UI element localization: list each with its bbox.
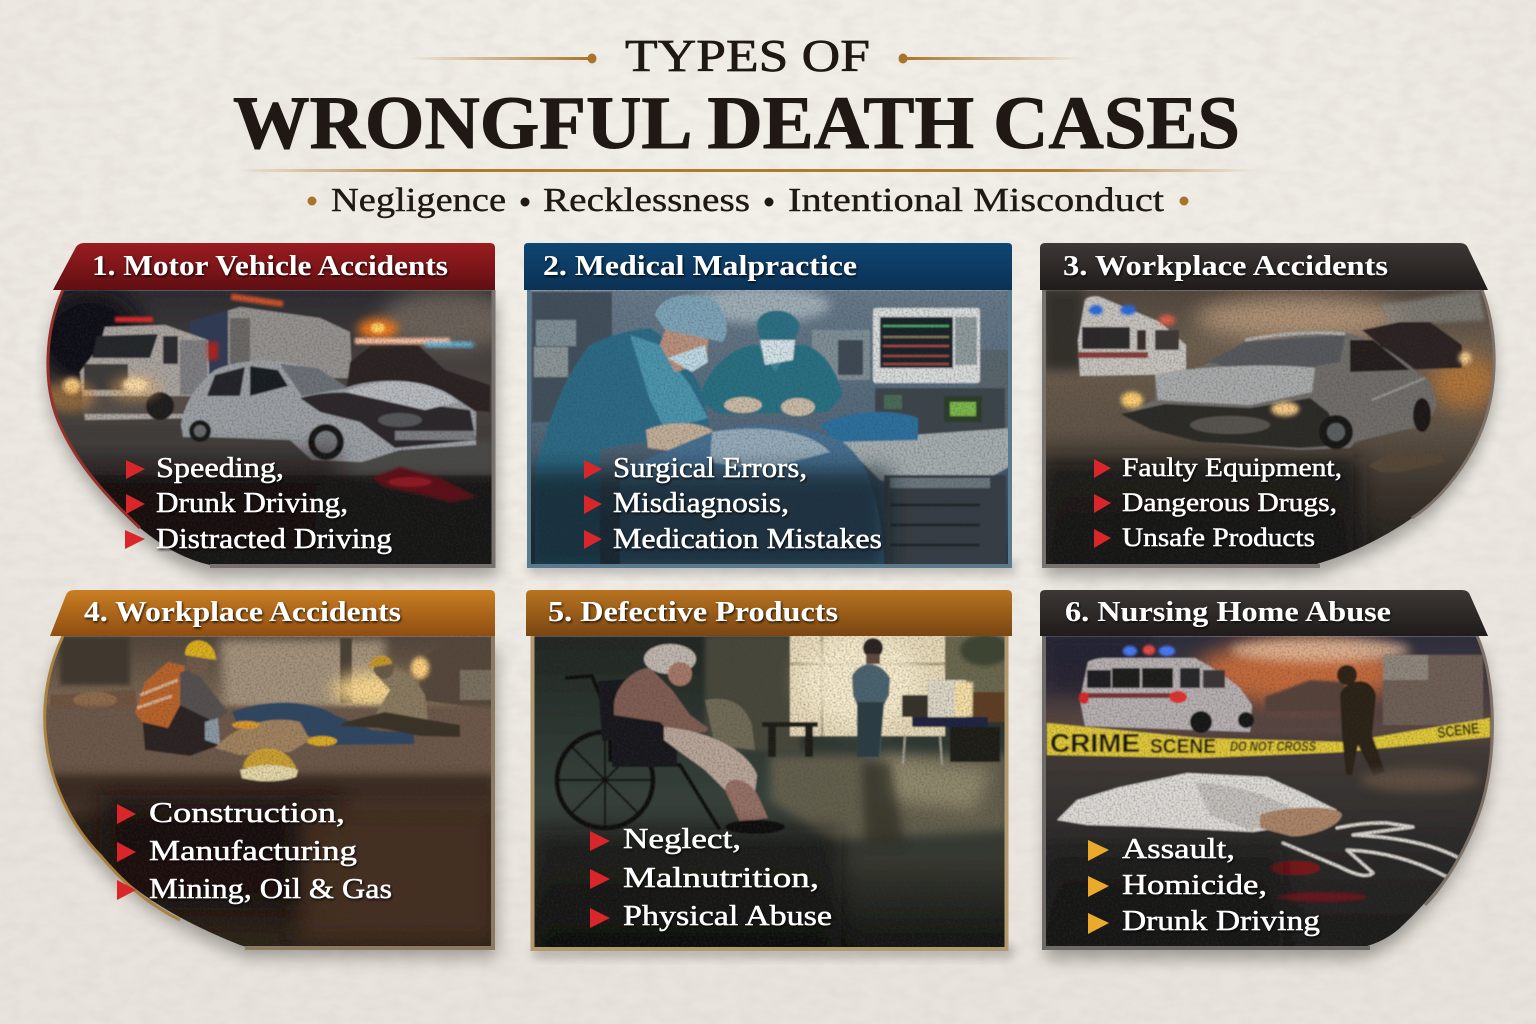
bullet list: Drunk Driving,	[156, 487, 348, 519]
monitor	[873, 308, 980, 383]
bullet list: Faulty Equipment,	[1122, 453, 1342, 482]
panel: 3 workplace accidents	[1040, 243, 1500, 576]
bullet list: Construction,	[149, 797, 345, 829]
subtitle with bullet terms: Intentional Misconduct	[788, 182, 1165, 219]
rocks	[50, 690, 140, 735]
tape text	[1050, 720, 1480, 758]
banner	[53, 243, 495, 290]
bullet list: Physical Abuse	[623, 900, 832, 932]
bullet list: Misdiagnosis,	[613, 487, 789, 519]
bullet list	[584, 452, 882, 555]
ground lower dark	[1040, 458, 1360, 573]
tow truck cab	[80, 325, 210, 420]
surgeon 1	[535, 328, 712, 567]
back wall with plants	[705, 636, 800, 751]
standing person	[1340, 681, 1385, 776]
elderly woman	[614, 668, 708, 735]
bullet list	[1088, 833, 1320, 937]
panel: 4 workplace accidents	[40, 590, 497, 958]
wrecked car	[1120, 333, 1437, 450]
panel: 5 defective products	[526, 590, 1013, 958]
panel border	[532, 636, 1006, 949]
side table	[762, 722, 818, 727]
banner title: 1. Motor Vehicle Accidents	[92, 250, 448, 282]
panel border	[48, 290, 140, 528]
panel border	[45, 636, 180, 920]
banner title: 2. Medical Malpractice	[543, 250, 857, 282]
subtitle with bullet terms	[308, 182, 1188, 219]
bullet list: Speeding,	[156, 452, 284, 484]
worker one	[142, 695, 220, 756]
banner	[1040, 590, 1488, 636]
bullet list	[117, 797, 392, 905]
bullet list: Distracted Driving	[156, 523, 392, 555]
title ornaments	[405, 54, 1085, 64]
covered body	[1057, 773, 1337, 832]
photo: operating room	[520, 287, 1012, 575]
surgeon 2	[700, 345, 843, 414]
armchair	[705, 699, 755, 750]
tape text: CRIME	[1050, 728, 1140, 758]
title divider	[235, 169, 1260, 172]
police suv	[1080, 658, 1252, 732]
bullet list: Medication Mistakes	[613, 523, 882, 555]
blood on road	[372, 467, 476, 502]
patient drape	[620, 425, 885, 567]
nurse	[852, 664, 890, 758]
ambulance	[1078, 296, 1186, 376]
photo: construction site	[40, 636, 496, 950]
police car and lights	[345, 345, 490, 412]
bullet list: Drunk Driving	[1122, 905, 1320, 937]
title line: types of: TYPES OF	[625, 30, 870, 81]
table and lamp	[902, 695, 928, 717]
crime scene tape	[1047, 718, 1490, 758]
bullet list: Surgical Errors,	[613, 452, 807, 484]
banner title: 3. Workplace Accidents	[1063, 250, 1388, 282]
panel border	[1412, 290, 1494, 518]
bullet list: Assault,	[1122, 833, 1235, 865]
chalk outline	[1283, 823, 1457, 877]
panel: 2 medical malpractice	[520, 243, 1015, 575]
panel: 6 nursing home abuse	[1040, 590, 1500, 959]
bullet list: Dangerous Drugs,	[1122, 488, 1337, 517]
title line: wrongful death cases: WRONGFUL DEATH CASES	[233, 82, 1240, 165]
bullet list: Unsafe Products	[1122, 523, 1315, 552]
photo: crime scene	[1040, 636, 1500, 950]
box truck	[226, 306, 352, 379]
bullet list	[125, 452, 392, 555]
tape text: DO NOT CROSS	[1230, 738, 1317, 754]
bullet list: Homicide,	[1122, 869, 1267, 901]
banner title: 5. Defective Products	[548, 596, 838, 628]
nurse shadow	[862, 762, 905, 845]
white bed	[842, 428, 1008, 482]
banner	[1040, 243, 1488, 290]
bullet list	[590, 823, 832, 932]
floor light	[770, 755, 1008, 840]
blood stains	[1270, 861, 1320, 875]
banner title: 4. Workplace Accidents	[84, 596, 401, 628]
bullet list	[1094, 453, 1342, 552]
subtitle with bullet terms: Recklessness	[543, 182, 750, 219]
panel: 1 motor vehicle accidents	[35, 243, 520, 576]
far car	[1362, 322, 1462, 370]
bright window	[790, 636, 945, 736]
feet	[1260, 807, 1342, 836]
panel border	[1425, 636, 1492, 905]
dark lower vignette	[531, 830, 841, 955]
dark lower vignette	[520, 470, 890, 575]
bullet list: Manufacturing	[149, 835, 357, 867]
title block	[233, 30, 1260, 219]
victim on ground	[232, 703, 414, 745]
banner	[524, 243, 1012, 290]
right equipment	[975, 350, 1008, 428]
worker two	[372, 668, 428, 728]
bullet list: Neglect,	[623, 823, 741, 855]
photo: wrecked car	[1040, 290, 1500, 573]
photo: crash scene	[49, 290, 492, 565]
bullet list: Mining, Oil & Gas	[149, 873, 392, 905]
banner title: 6. Nursing Home Abuse	[1065, 596, 1391, 628]
bullet list: Malnutrition,	[623, 862, 819, 894]
tape text: SCENE	[1436, 720, 1480, 742]
sunset sky	[1195, 640, 1405, 704]
fallen hard hat	[243, 748, 297, 770]
road debris	[1368, 456, 1444, 472]
tape text: SCENE	[1150, 736, 1216, 758]
skyline and glow	[60, 637, 130, 685]
banner	[50, 590, 495, 636]
photo: nursing home room	[531, 634, 1010, 955]
wrecked silver car	[181, 361, 476, 462]
panel border	[529, 290, 1010, 566]
cart	[884, 475, 1006, 568]
blue pillow	[820, 412, 918, 442]
ground	[45, 706, 495, 776]
subtitle with bullet terms: Negligence	[331, 182, 506, 219]
wheelchair	[557, 676, 720, 830]
warm ground streaks	[1360, 768, 1480, 792]
banner	[526, 590, 1012, 636]
